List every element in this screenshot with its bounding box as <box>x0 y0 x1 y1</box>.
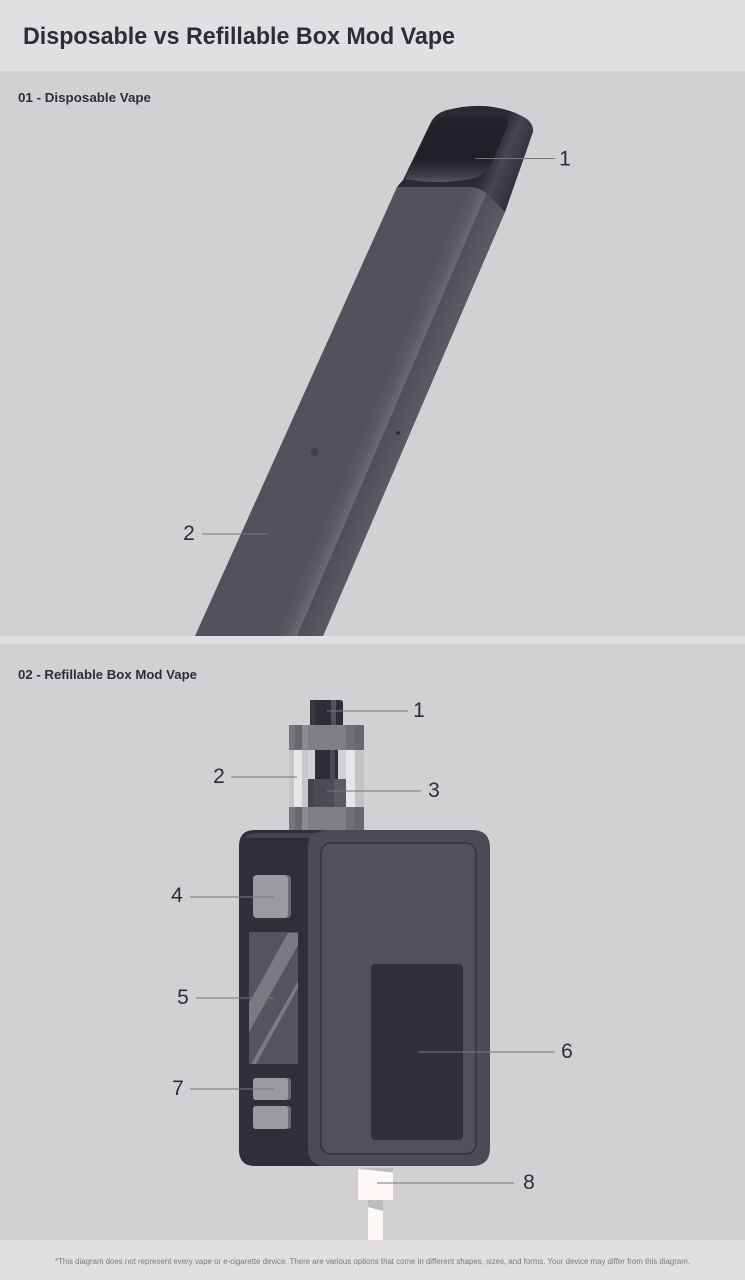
screen <box>249 932 298 1064</box>
vape mouthpiece recess <box>405 116 508 182</box>
callout 5 <box>177 986 274 1009</box>
bottom collar <box>289 807 364 831</box>
heading: 01 disposable vape: 01 - Disposable Vape <box>18 90 151 105</box>
illustration: box mod <box>239 830 490 1166</box>
footnote: *This diagram does not represent every vape or e-cigarette device. There are various options that come in different shapes, sizes, and forms. Your device may differ from this diagram. <box>55 1257 690 1266</box>
callout 2 <box>183 522 268 545</box>
up button <box>253 1078 291 1100</box>
battery window <box>371 964 463 1140</box>
illustration: disposable vape device <box>195 106 533 636</box>
vape cap <box>397 106 533 212</box>
callout 1 <box>475 148 571 170</box>
box top edge strip <box>245 833 322 838</box>
illustration: atomizer tank <box>289 700 364 831</box>
body side face <box>297 185 512 636</box>
fire button <box>253 875 291 918</box>
panel: disposable vape <box>0 71 745 636</box>
box dark side <box>239 830 340 1166</box>
callout 6: 6 <box>561 1040 573 1063</box>
callout 8: 8 <box>523 1171 535 1194</box>
footer band <box>0 1240 745 1280</box>
callout 1 <box>327 699 425 722</box>
divider band <box>0 636 745 644</box>
front face <box>308 830 490 1166</box>
callout 7: 7 <box>172 1077 184 1100</box>
callout 3: 3 <box>428 779 440 802</box>
callout 1: 1 <box>559 148 571 170</box>
panel: refillable box mod vape <box>0 644 745 1240</box>
callout 3 <box>327 779 440 802</box>
top collar <box>289 725 364 750</box>
title: Disposable vs Refillable Box Mod Vape <box>23 23 455 50</box>
heading: 02 refillable box mod vape: 02 - Refillable Box Mod Vape <box>18 667 197 682</box>
illustration: charging cable <box>358 1168 393 1240</box>
drip tip <box>310 700 343 726</box>
callout 1: 1 <box>413 699 425 722</box>
callout 2: 2 <box>213 765 225 788</box>
callout 5: 5 <box>177 986 189 1009</box>
front sensor dot <box>310 447 319 457</box>
lower coil chunk <box>308 779 346 808</box>
callout 4 <box>171 884 274 907</box>
header band <box>0 0 745 71</box>
down button <box>253 1106 291 1129</box>
center tube <box>315 750 338 780</box>
callout 2 <box>213 765 297 788</box>
callout 7 <box>172 1077 274 1100</box>
callout 2: 2 <box>183 522 195 545</box>
vape body <box>195 175 510 636</box>
glass tank <box>289 750 364 808</box>
body highlight band <box>273 185 490 636</box>
front inner panel <box>321 843 476 1154</box>
side hole dot <box>396 431 400 435</box>
callout 4: 4 <box>171 884 183 907</box>
